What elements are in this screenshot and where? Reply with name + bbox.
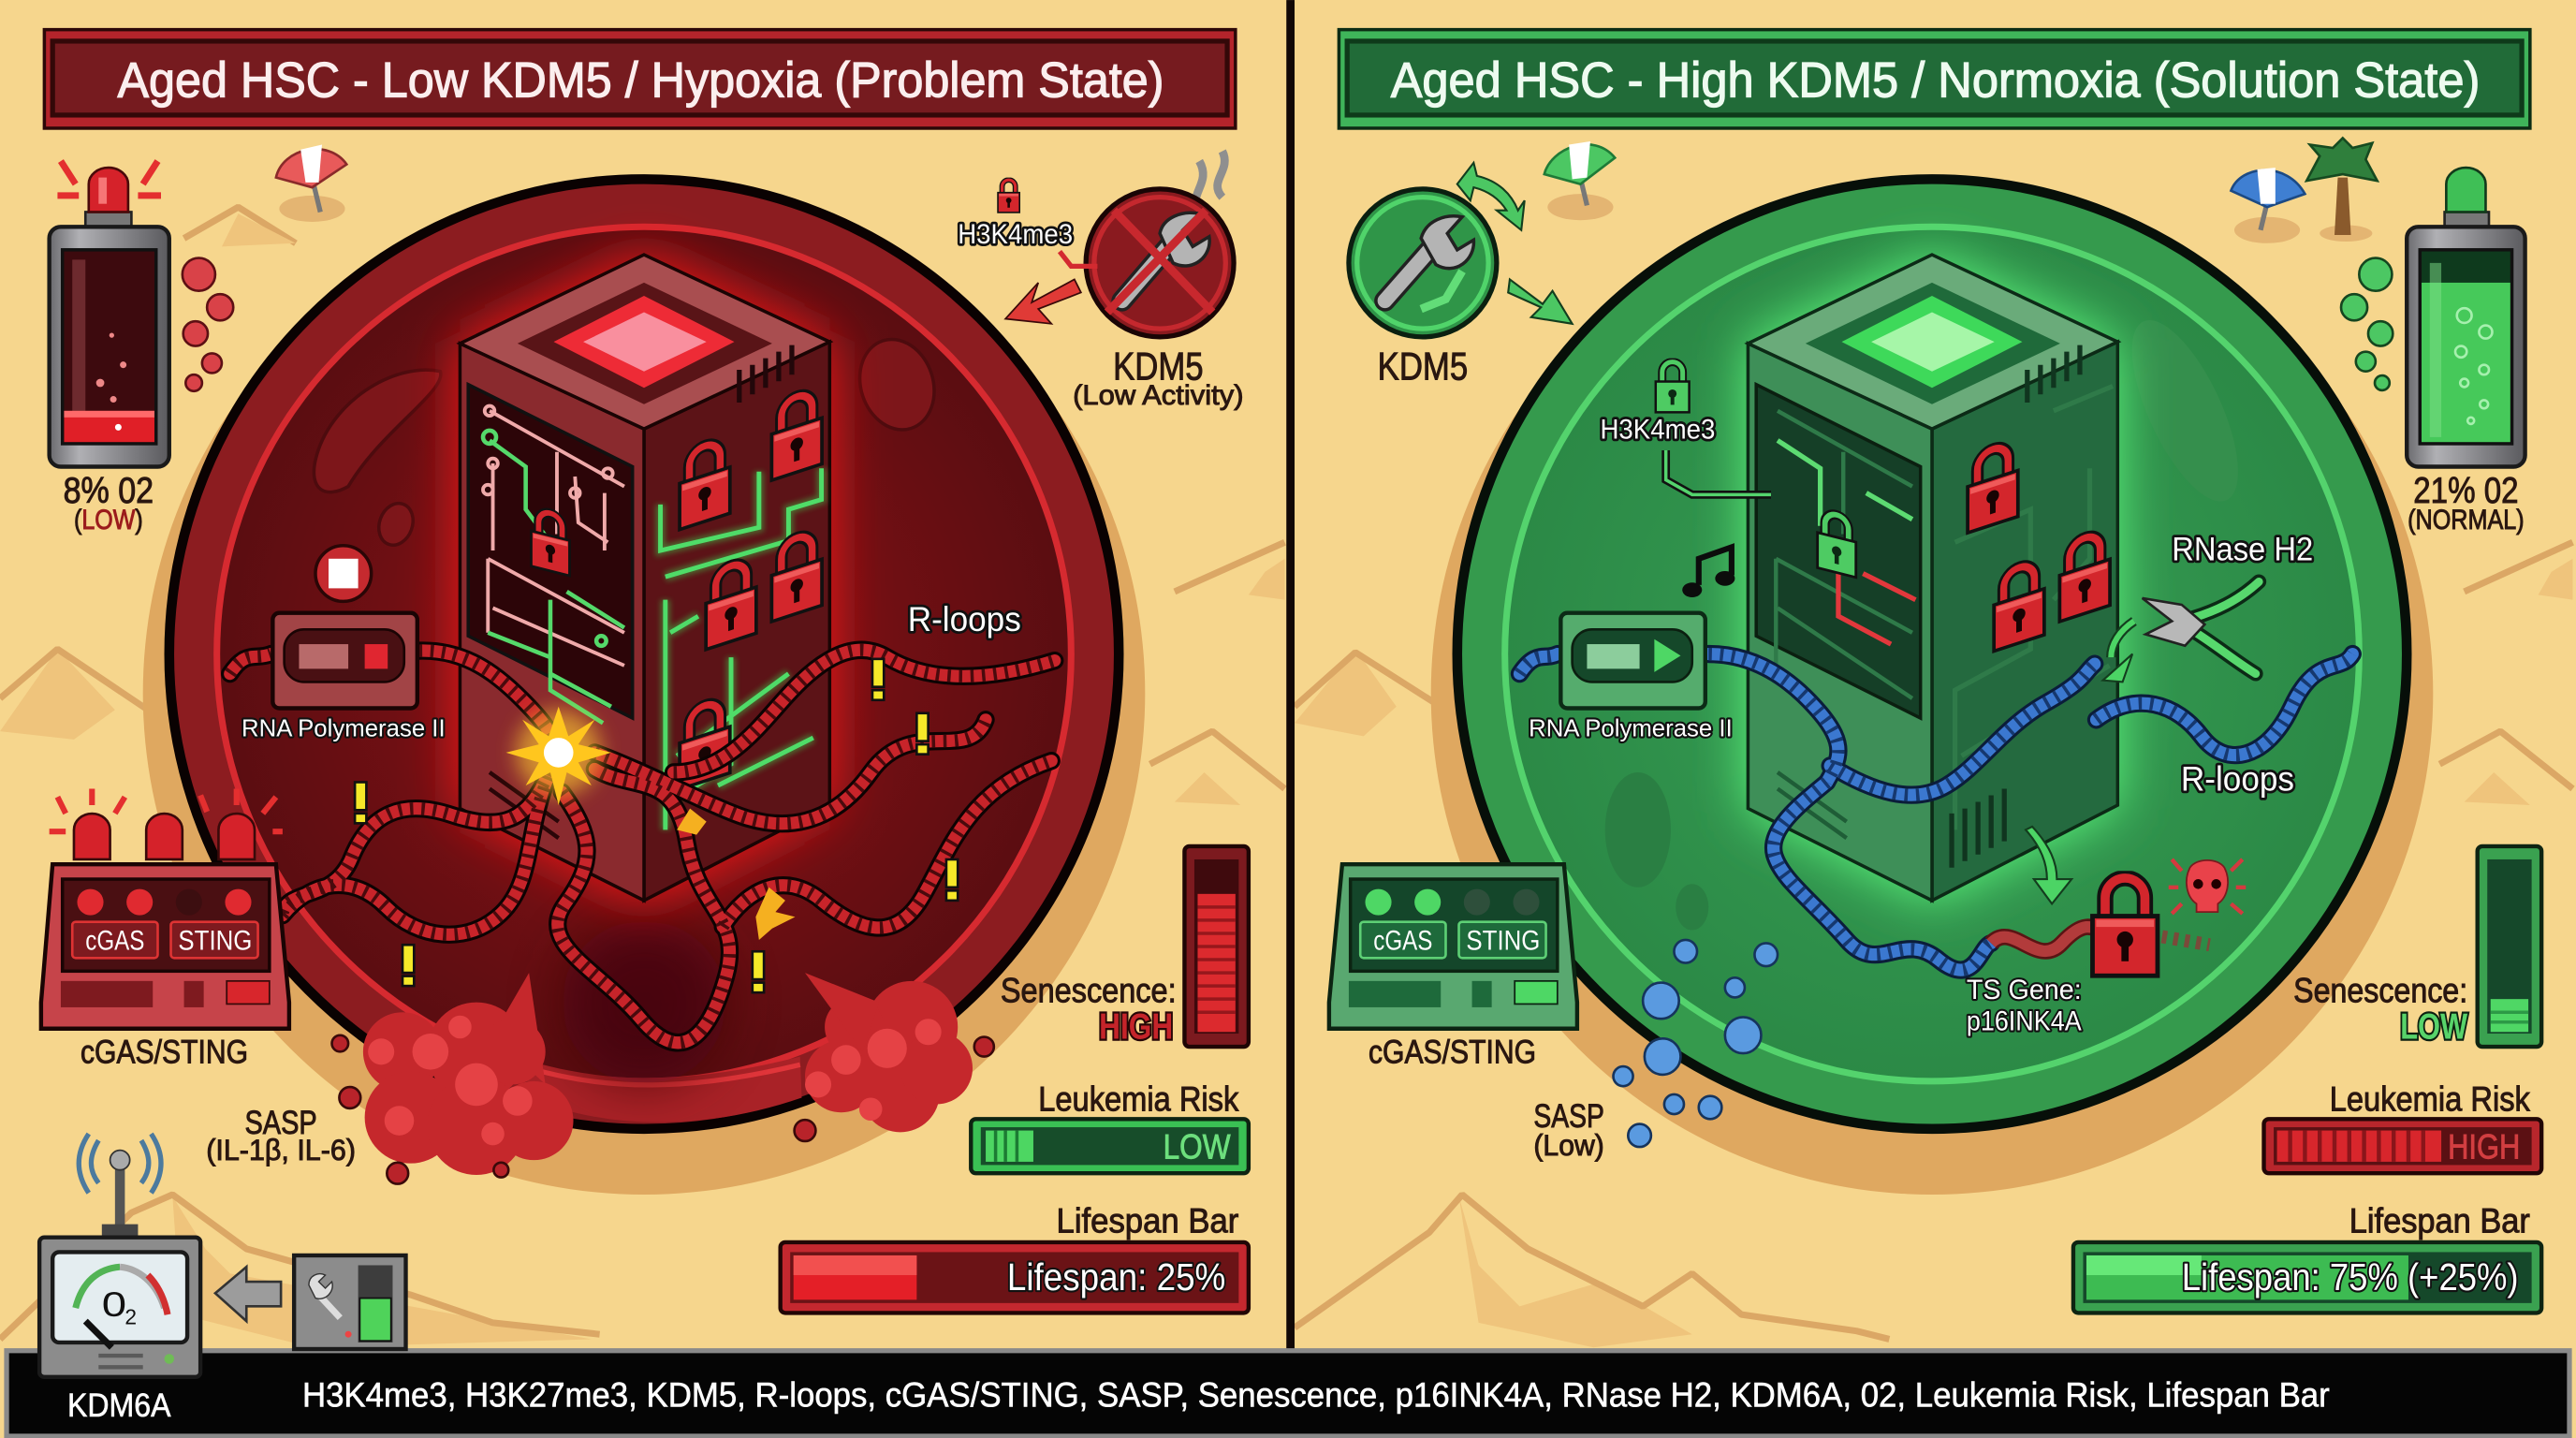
lower cell rim: [526, 1057, 801, 1123]
collision explosion: [506, 707, 795, 940]
label: senescence high: HIGH: [1099, 1006, 1173, 1047]
leukemia risk bar: high: [2264, 1080, 2541, 1173]
label: 21% O2 normal: [2408, 471, 2525, 536]
icon: blue beach umbrella: [2231, 168, 2305, 243]
title banner: solution state: Aged HSC - High KDM5 / Normoxia (Solution State): [1391, 53, 2480, 109]
tower: [460, 255, 829, 901]
DNA strands tangled with R-loops: [230, 650, 1055, 1043]
KDM6A oxygen-sensor device: [39, 1134, 200, 1377]
senescence gauge: high: [1184, 846, 1249, 1047]
label: R-loops: R-loops: [2181, 759, 2294, 798]
oxygen bubbles, red: [183, 258, 233, 391]
label: KDM5 low activity: (Low Activity): [1073, 380, 1244, 411]
label: senescence low: LOW: [2400, 1006, 2468, 1047]
arrow: gray, to sensor: [215, 1267, 281, 1321]
icon: music note: [1699, 548, 1732, 585]
tower glow: [460, 255, 829, 901]
label: RNA Polymerase II: RNA Polymerase II: [242, 715, 446, 741]
circuit lines, right face: [661, 468, 822, 829]
H3K4me3 label with open lock: [1600, 362, 1771, 494]
DNA strands repaired: [1519, 654, 2352, 970]
label: 21% O2 normal: 21% 02: [2413, 471, 2519, 511]
label: SASP low: SASP: [1533, 1098, 1604, 1135]
label: SASP low: (Low): [1533, 1128, 1604, 1162]
divider between panels: [1286, 0, 1295, 1351]
warning marks: [355, 659, 958, 992]
vents and vent slots: [739, 345, 792, 403]
icon: palm tree: [2306, 138, 2378, 242]
KDM5 switch box: [294, 1255, 406, 1349]
padlocks: [1818, 441, 2110, 652]
leukemia risk bar: low: LOW: [1164, 1127, 1231, 1166]
cGAS/STING console, quiet: cGAS: [1373, 926, 1432, 957]
H3K27me3-style padlocks: [531, 389, 822, 789]
lifespan bar: 25%: Lifespan Bar: [1057, 1201, 1238, 1240]
label: cGAS/STING: cGAS/STING: [1368, 1034, 1536, 1071]
stop button: [315, 546, 372, 601]
circuit lines, left face: [1776, 411, 1912, 698]
label: senescence high: Senescence:: [1001, 972, 1177, 1010]
lifespan bar: 75% plus 25%: Lifespan Bar: [2349, 1201, 2530, 1240]
lifespan bar: 75% plus 25%: Lifespan: 75% (+25%): [2182, 1255, 2519, 1299]
label: cGAS/STING: cGAS/STING: [80, 1034, 248, 1071]
SASP cloud, right: [805, 973, 973, 1132]
icon: green beacon: [2445, 168, 2489, 230]
label: senescence low: Senescence:: [2293, 972, 2467, 1010]
label: RNA Polymerase II: RNA Polymerase II: [1529, 715, 1733, 741]
label: SASP IL-1 beta, IL-6: [206, 1105, 356, 1167]
icon: beach umbrella, red: [276, 145, 346, 222]
label: R-loops: R-loops: [908, 600, 1021, 638]
antenna: [79, 1134, 161, 1236]
senescence gauge: low: [2478, 846, 2541, 1047]
label: KDM5 low activity: KDM5: [1113, 344, 1204, 388]
arrow: silencing to TS gene: [2026, 827, 2071, 903]
organelles: [1605, 306, 2260, 930]
cGAS/STING console, alarmed: STING: [178, 926, 252, 957]
label: 21% O2 normal: (NORMAL): [2408, 505, 2525, 536]
O2 bottle: 8% low: [50, 161, 169, 467]
icon: red skull danger: [2169, 859, 2246, 914]
title banner: problem state: Aged HSC - Low KDM5 / Hypoxia (Problem State): [117, 53, 1164, 109]
label: 8% O2 low: [64, 471, 154, 536]
KDM5 low activity icon: [1086, 152, 1234, 337]
organelles: [314, 330, 945, 550]
glow behind polymerase junction: [1810, 697, 1895, 782]
SASP cloud, left: [363, 973, 574, 1175]
SASP droplets: [332, 1035, 994, 1184]
cGAS/STING console, alarmed: cGAS: [85, 926, 144, 957]
KDM6A oxygen-sensor device: 0: [102, 1285, 126, 1324]
RNase H2 scissors tool: [2143, 532, 2313, 674]
title banner: problem state: [44, 30, 1236, 128]
label: KDM5: KDM5: [1378, 344, 1468, 388]
label: 8% O2 low: (LOW): [74, 505, 143, 536]
arrow: RNase H2 to DNA: [2103, 621, 2134, 682]
label: KDM6A: KDM6A: [67, 1387, 171, 1424]
leukemia risk bar: high: HIGH: [2448, 1127, 2520, 1166]
label: TS Gene p16INK4A: [1967, 975, 2082, 1037]
label: 8% O2 low: 8% 02: [64, 471, 154, 511]
label: senescence high: [1001, 972, 1177, 1047]
H3K4me3 label with open lock: H3K4me3: [1600, 415, 1715, 446]
music note heads: [1682, 571, 1734, 597]
cell cast shadows: [143, 192, 2433, 1195]
cell: solution state: [1457, 179, 2407, 1129]
icon: beach umbrella, green: [1544, 141, 1615, 220]
lifespan bar: 25%: Lifespan: 25%: [1007, 1255, 1225, 1299]
RNA polymerase II stalled: [272, 546, 417, 709]
RNase H2 scissors tool: RNase H2: [2172, 532, 2313, 568]
label: KDM5 low activity: [1073, 344, 1244, 411]
circuit lines, right face: [1955, 387, 2113, 829]
cell: problem state: [169, 179, 1119, 1129]
label: SASP low: [1533, 1098, 1604, 1162]
lifespan bar: 25%: [781, 1201, 1249, 1313]
vents: [1952, 345, 2080, 868]
leukemia risk bar: high: Leukemia Risk: [2330, 1080, 2530, 1119]
alarm beacons: [50, 789, 283, 859]
desert dunes: left panel: [0, 207, 1284, 1347]
SASP bubbles, blue: [1614, 940, 1778, 1147]
arrow: KDM5 to cell, red: [1005, 279, 1081, 324]
label: SASP IL-1 beta, IL-6: SASP: [245, 1105, 317, 1141]
lifespan bar: 75% plus 25%: [2073, 1201, 2541, 1313]
bottom legend bar: H3K4me3, H3K27me3, KDM5, R-loops, cGAS/STING, SASP, Senescence, p16INK4A, RNase H2, KDM6A, 02, Leukemia Risk, Lifespan Bar: [302, 1375, 2330, 1414]
cGAS/STING console, quiet: STING: [1466, 926, 1540, 957]
label: senescence low: [2293, 972, 2468, 1047]
KDM6A oxygen-sensor device: 2: [124, 1305, 137, 1329]
icon: alarm beacon: [57, 161, 161, 230]
cGAS/STING console, alarmed: [41, 789, 289, 1029]
tower glow: [1748, 255, 2117, 901]
title banner: solution state: [1339, 30, 2530, 128]
circuit lines, left face: [483, 406, 624, 666]
KDM5 active icon: [1349, 189, 1497, 337]
silenced tumor-suppressor gene strand: [1991, 927, 2210, 951]
desert dunes: right panel: [1295, 542, 2572, 1347]
oxygen bubbles, green: [2341, 258, 2393, 390]
bottom legend bar: [7, 1351, 2569, 1436]
cGAS/STING console, quiet: [1329, 864, 1577, 1029]
RNA polymerase II running: [1560, 613, 1705, 709]
label: TS Gene p16INK4A: p16INK4A: [1967, 1006, 2082, 1037]
arrows: KDM5 cycle and to cell: [1457, 163, 1573, 324]
leukemia risk bar: low: [971, 1080, 1249, 1173]
tower: [1748, 255, 2117, 901]
label: TS Gene p16INK4A: TS Gene:: [1967, 975, 2082, 1005]
O2 bottle: 21% normal: [2407, 168, 2525, 467]
label: SASP IL-1 beta, IL-6: (IL-1β, IL-6): [206, 1133, 356, 1167]
leukemia risk bar: low: Leukemia Risk: [1038, 1080, 1239, 1119]
TS gene padlock: [2092, 878, 2158, 976]
H3K4me3 label with small lock: [958, 180, 1097, 266]
H3K4me3 label with small lock: H3K4me3: [958, 219, 1073, 250]
